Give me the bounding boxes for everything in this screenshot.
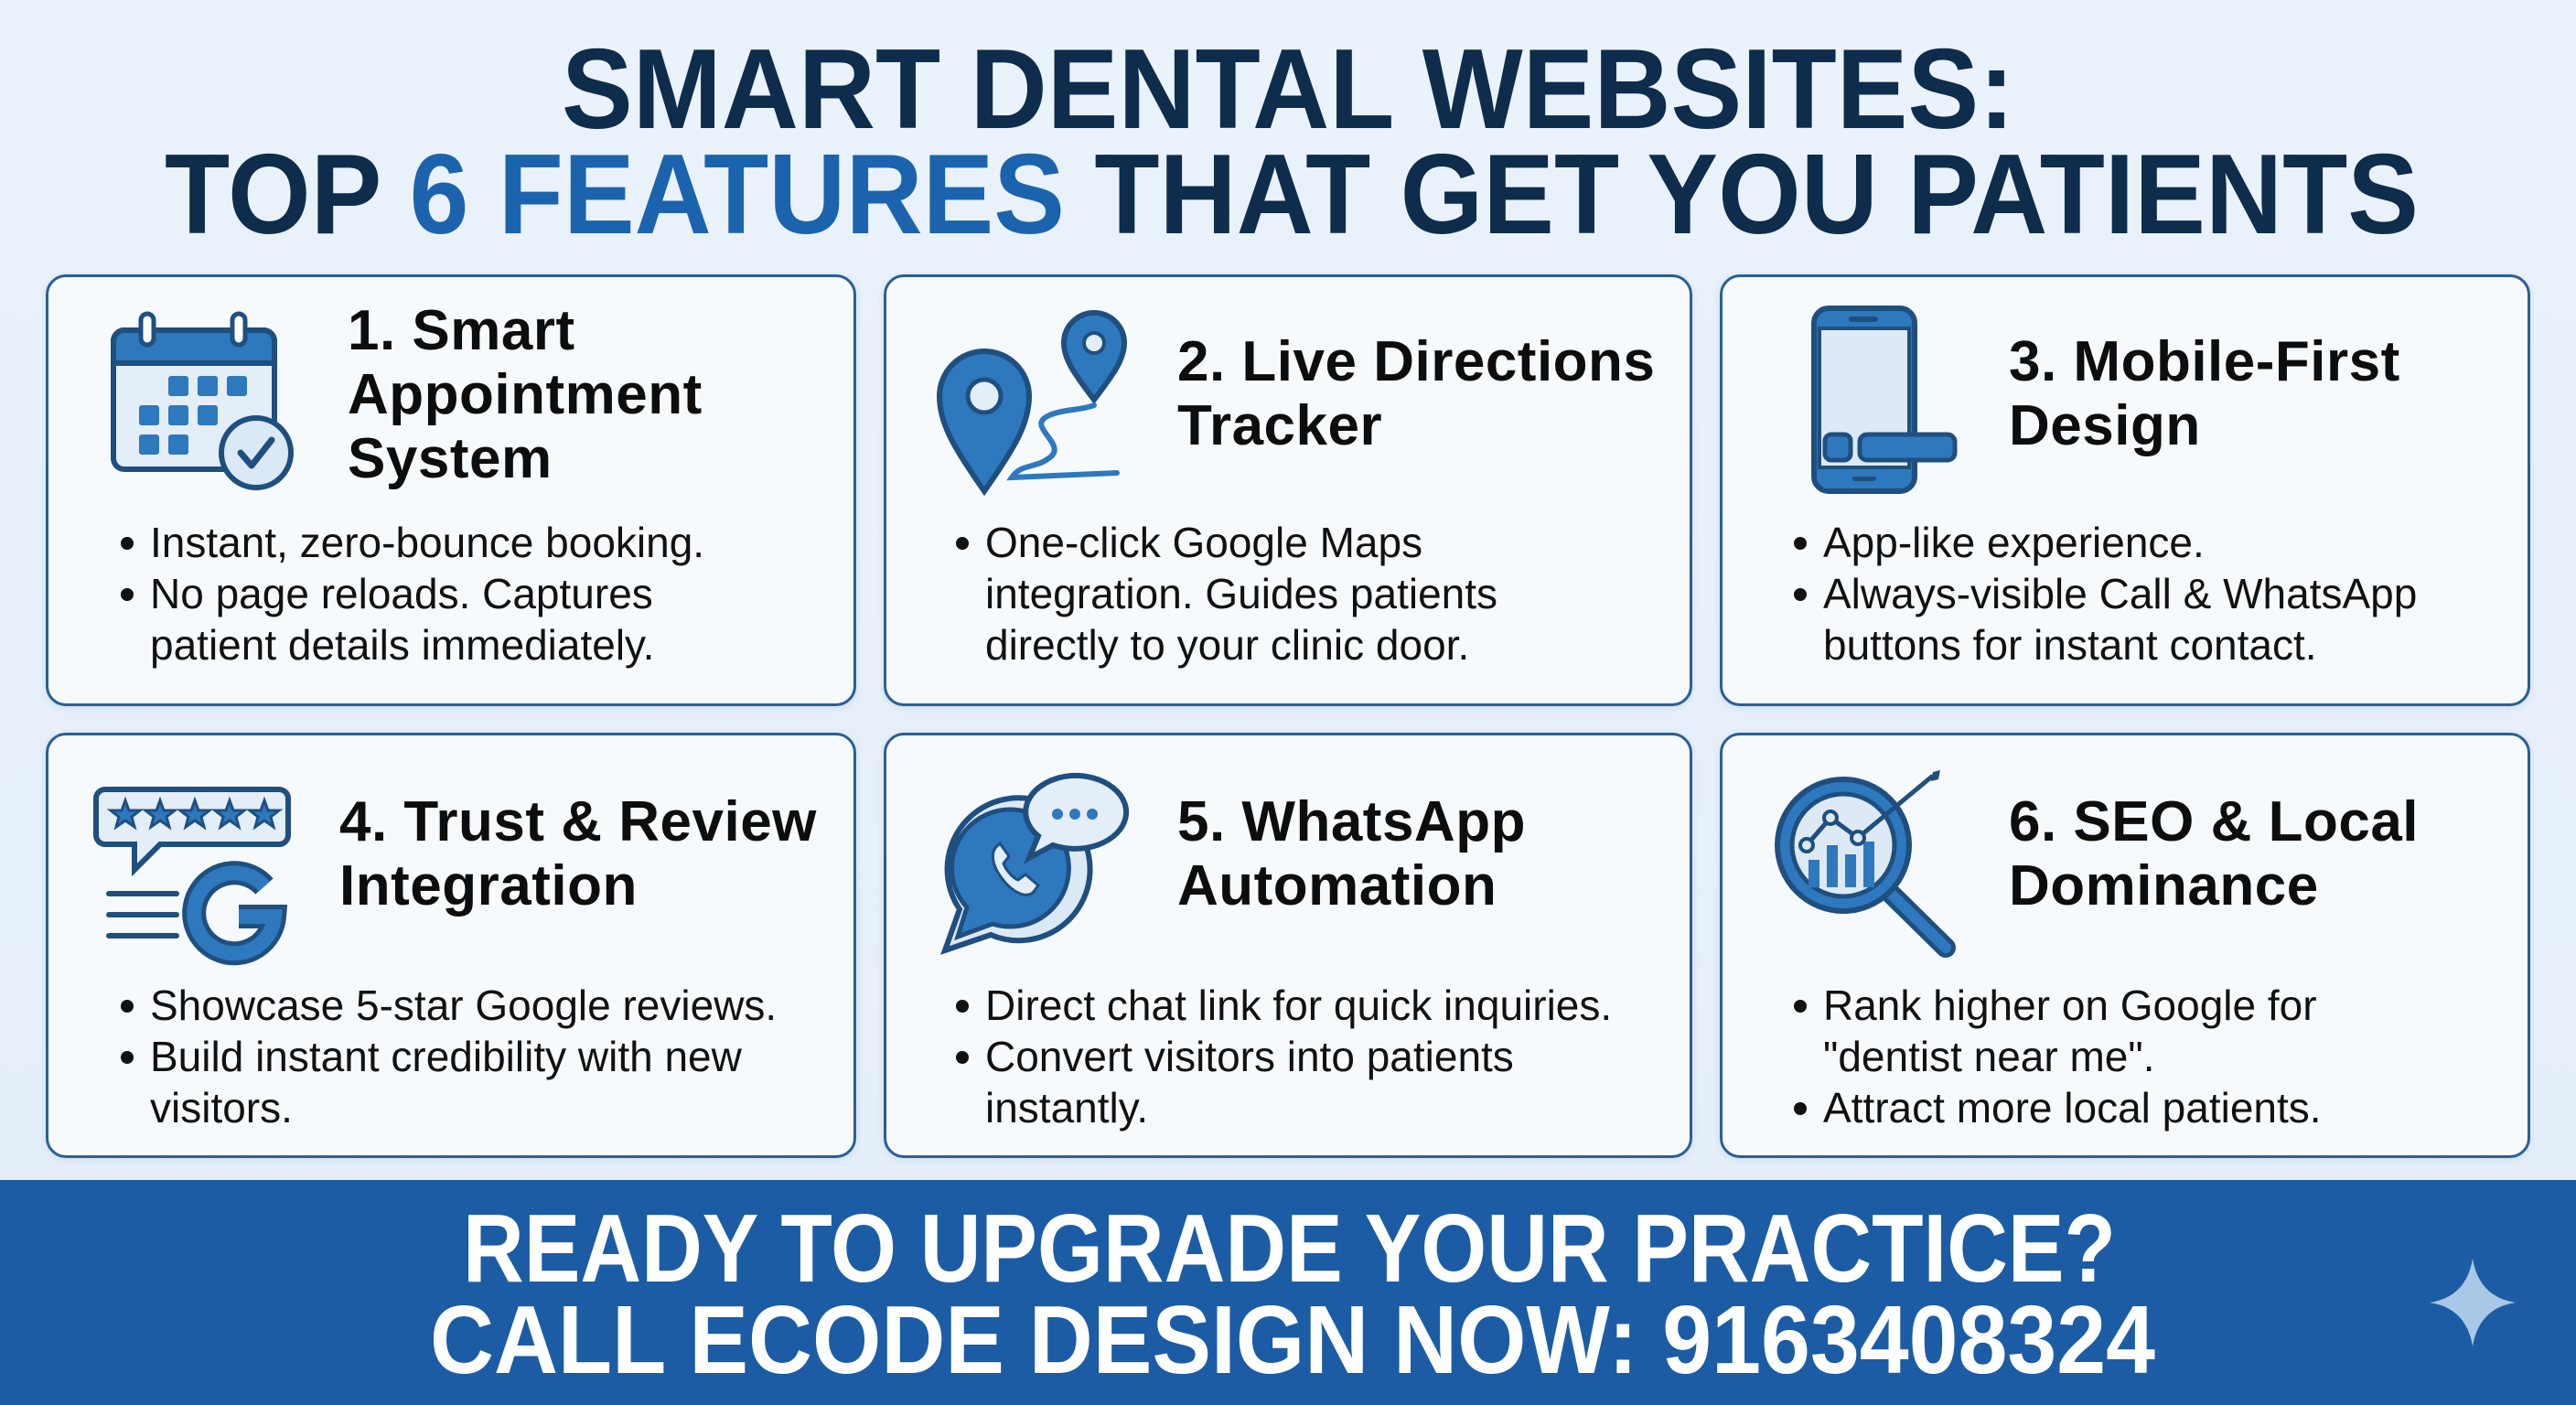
heading — [1177, 330, 1655, 457]
text block: directly to your clinic door. — [985, 621, 1469, 669]
heading — [2009, 330, 2400, 457]
text block — [1794, 519, 2417, 669]
heading: Design — [2009, 394, 2201, 457]
heading — [339, 790, 817, 917]
text block: Always-visible Call & WhatsApp — [1823, 570, 2417, 617]
icon: sparkle — [2430, 1259, 2516, 1346]
panel: live directions tracker — [884, 274, 1692, 706]
text block — [956, 981, 1612, 1132]
banner: call to action: READY TO UPGRADE YOUR PRACTICE? — [463, 1195, 2116, 1303]
text block: Showcase 5-star Google reviews. — [150, 981, 777, 1029]
panel: whatsapp automation — [884, 733, 1692, 1158]
icon: map pins with route — [937, 310, 1127, 496]
text block: Instant, zero-bounce booking. — [150, 519, 704, 566]
text block: Build instant credibility with new — [150, 1033, 742, 1080]
heading: 5. WhatsApp — [1177, 790, 1526, 853]
heading — [348, 299, 703, 490]
text block: Direct chat link for quick inquiries. — [985, 981, 1612, 1029]
heading: 1. Smart — [348, 299, 575, 362]
heading: 6. SEO & Local — [2009, 790, 2419, 853]
text block: App-like experience. — [1823, 519, 2205, 566]
icon: calendar with check — [111, 311, 294, 490]
text block — [121, 981, 777, 1132]
heading: Tracker — [1177, 394, 1382, 457]
heading: 2. Live Directions — [1177, 330, 1655, 393]
icon: stars review with G — [93, 787, 291, 966]
heading — [2009, 790, 2419, 917]
heading: Appointment — [348, 363, 703, 426]
icon: smartphone — [1811, 306, 1958, 494]
icon: magnifier with chart — [1775, 770, 1956, 958]
heading: Integration — [339, 854, 638, 917]
title: SMART DENTAL WEBSITES: — [562, 27, 2014, 153]
text block: Convert visitors into patients — [985, 1033, 1514, 1080]
text block — [1794, 981, 2322, 1132]
text block: instantly. — [985, 1084, 1148, 1132]
text block: Attract more local patients. — [1823, 1084, 2322, 1132]
text block: "dentist near me". — [1823, 1033, 2155, 1080]
heading: 3. Mobile-First — [2009, 330, 2400, 393]
icon: whatsapp chat — [940, 772, 1129, 955]
panel: smart appointment system — [46, 274, 856, 706]
text block: patient details immediately. — [150, 621, 654, 669]
panel: mobile-first design — [1720, 274, 2530, 706]
heading: Automation — [1177, 854, 1497, 917]
text block — [121, 519, 704, 669]
heading — [1177, 790, 1526, 917]
banner: call to action: CALL ECODE DESIGN NOW: 9163408324 — [430, 1286, 2155, 1394]
title: TOP 6 FEATURES THAT GET YOU PATIENTS — [165, 132, 2419, 258]
text block: buttons for instant contact. — [1823, 621, 2317, 669]
text block: Rank higher on Google for — [1823, 981, 2317, 1029]
text block — [956, 519, 1497, 669]
text block: integration. Guides patients — [985, 570, 1497, 617]
banner: call to action — [0, 1180, 2576, 1405]
heading: Dominance — [2009, 854, 2319, 917]
panel: trust & review integration — [46, 733, 856, 1158]
heading: 4. Trust & Review — [339, 790, 817, 853]
title — [165, 27, 2419, 258]
text block: No page reloads. Captures — [150, 570, 653, 617]
heading: System — [348, 427, 553, 490]
text block: visitors. — [150, 1084, 293, 1132]
text block: One-click Google Maps — [985, 519, 1422, 566]
panel: seo & local dominance — [1720, 733, 2530, 1158]
